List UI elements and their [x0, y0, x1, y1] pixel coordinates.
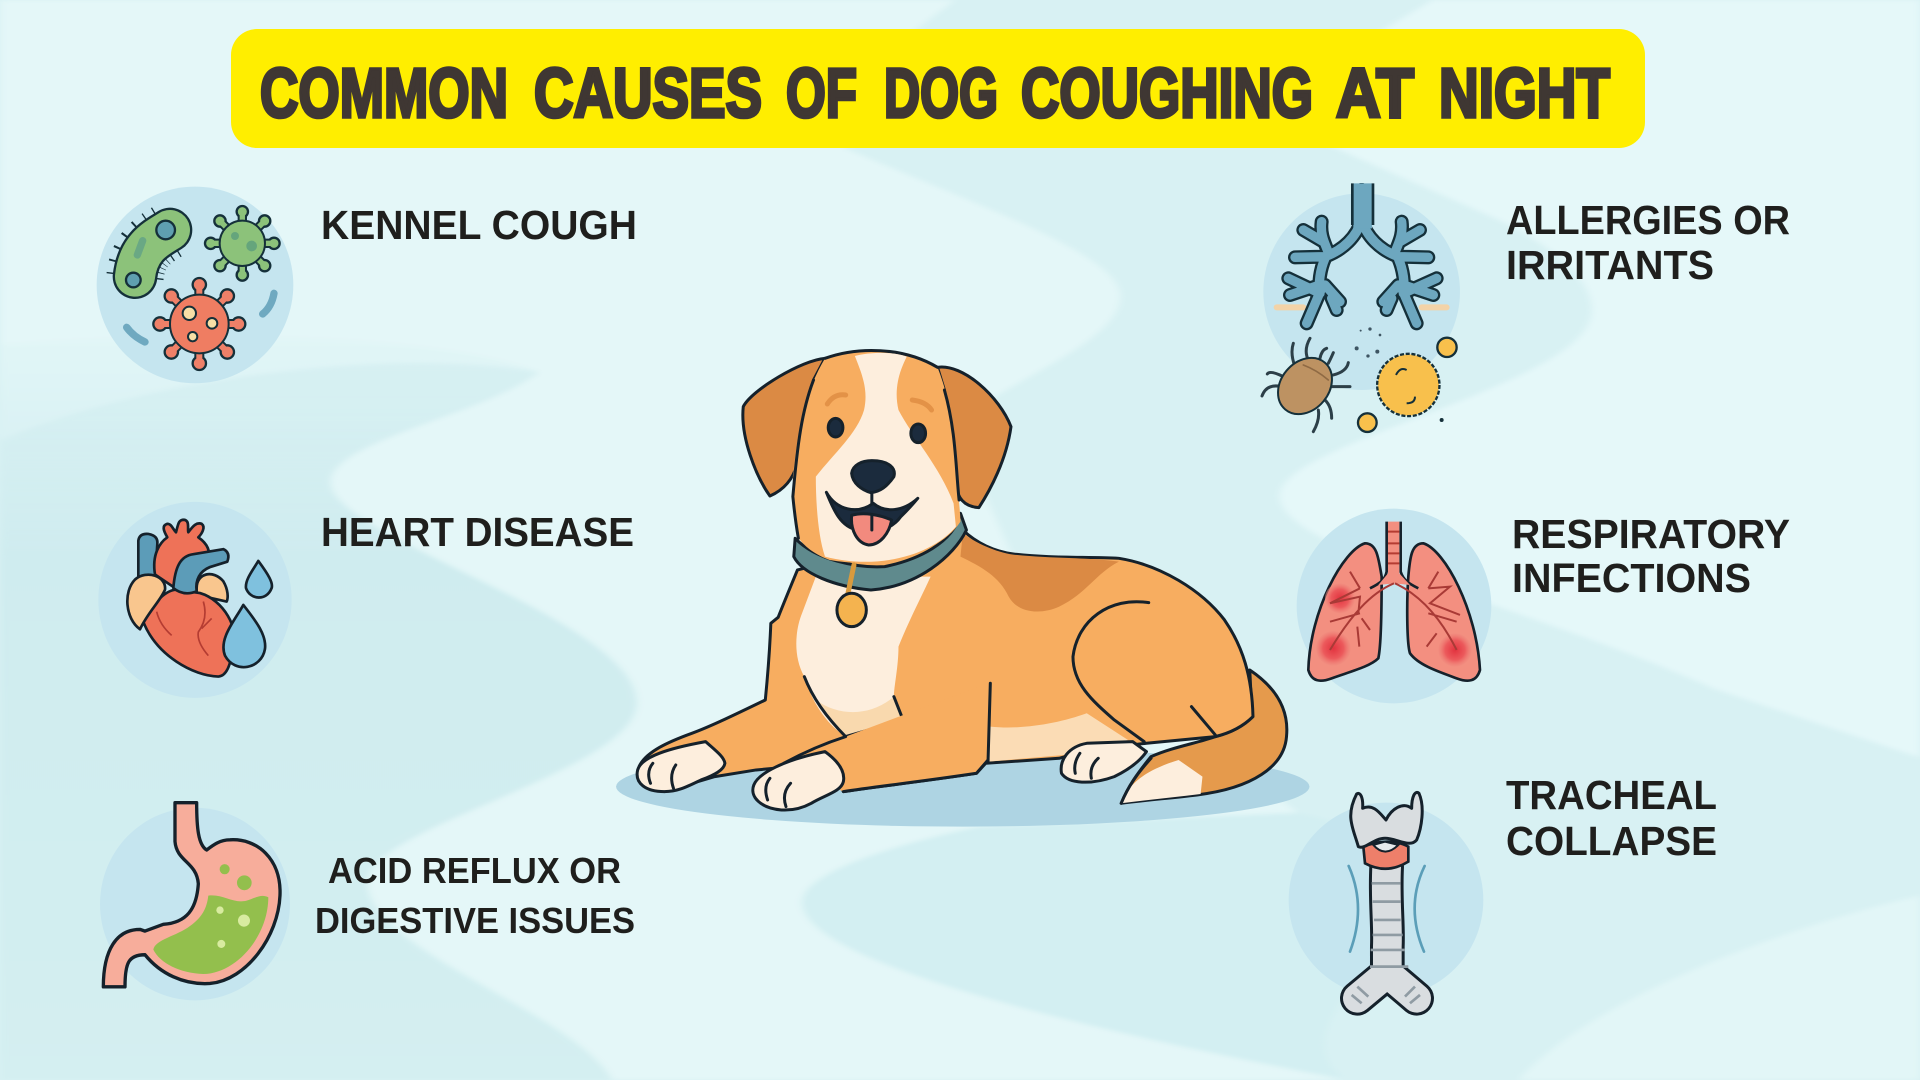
icon: trachea — [1289, 792, 1483, 1005]
eyebrows — [827, 395, 932, 410]
ground shadow — [616, 747, 1309, 827]
eyes — [828, 418, 843, 437]
tail — [1121, 670, 1287, 803]
heart — [127, 520, 235, 677]
label: kennel cough: KENNEL COUGH — [321, 202, 637, 248]
label: tracheal collapse: TRACHEAL — [1506, 772, 1717, 818]
belly — [988, 713, 1128, 762]
title text: DOG — [884, 54, 998, 132]
stomach acid — [153, 895, 268, 974]
tracheal tube — [1352, 867, 1420, 1005]
collar tag — [848, 565, 854, 593]
dust specks — [1355, 327, 1381, 358]
head — [793, 350, 960, 563]
title text: NIGHT — [1439, 54, 1610, 132]
label: acid reflux: DIGESTIVE ISSUES — [315, 900, 635, 941]
dog illustration — [616, 350, 1309, 827]
bacterium — [126, 221, 175, 287]
label: acid reflux — [315, 850, 635, 941]
pollen — [1358, 338, 1457, 432]
red virus — [153, 278, 245, 370]
icon: lungs — [1297, 509, 1491, 703]
title text: AT — [1336, 54, 1414, 132]
label: heart disease: HEART DISEASE — [321, 509, 634, 555]
label: allergies — [1506, 197, 1790, 288]
label: respiratory infections: INFECTIONS — [1512, 555, 1751, 601]
dust mite — [1262, 338, 1350, 432]
left lung — [1308, 543, 1382, 681]
label: allergies: IRRITANTS — [1506, 242, 1714, 288]
title banner — [231, 29, 1645, 148]
front paws — [637, 742, 725, 792]
stomach — [103, 803, 280, 987]
icon: allergies — [1262, 183, 1460, 432]
icon: kennel cough germs — [97, 187, 293, 383]
body — [639, 530, 1253, 792]
title text — [260, 54, 1610, 132]
mouth — [826, 492, 918, 532]
infection spots — [1325, 583, 1355, 613]
icon: heart disease — [98, 502, 292, 698]
back patch — [960, 533, 1119, 612]
back paw — [1061, 742, 1146, 782]
thyroid cartilage — [1351, 792, 1422, 847]
ears — [743, 358, 825, 496]
right lung — [1407, 543, 1480, 681]
label: acid reflux: ACID REFLUX OR — [328, 850, 621, 891]
collar — [794, 513, 966, 590]
cricoid ring — [1363, 842, 1408, 869]
face blaze — [816, 353, 956, 562]
chest — [796, 577, 931, 737]
label: tracheal collapse — [1506, 772, 1717, 864]
nose — [852, 461, 894, 493]
label: respiratory infections: RESPIRATORY — [1512, 511, 1790, 557]
green virus — [205, 206, 280, 281]
icon: stomach acid reflux — [100, 803, 290, 1000]
title text: COMMON — [260, 54, 508, 132]
water drops — [223, 561, 272, 667]
label: tracheal collapse: COLLAPSE — [1506, 818, 1717, 864]
title text: CAUSES — [534, 54, 762, 132]
title text: OF — [786, 54, 857, 132]
bronchi — [1288, 190, 1437, 323]
airways — [1370, 522, 1418, 588]
label: respiratory infections — [1512, 511, 1790, 601]
label: allergies: ALLERGIES OR — [1506, 197, 1790, 243]
haunch — [1073, 602, 1215, 742]
title text: COUGHING — [1021, 54, 1313, 132]
